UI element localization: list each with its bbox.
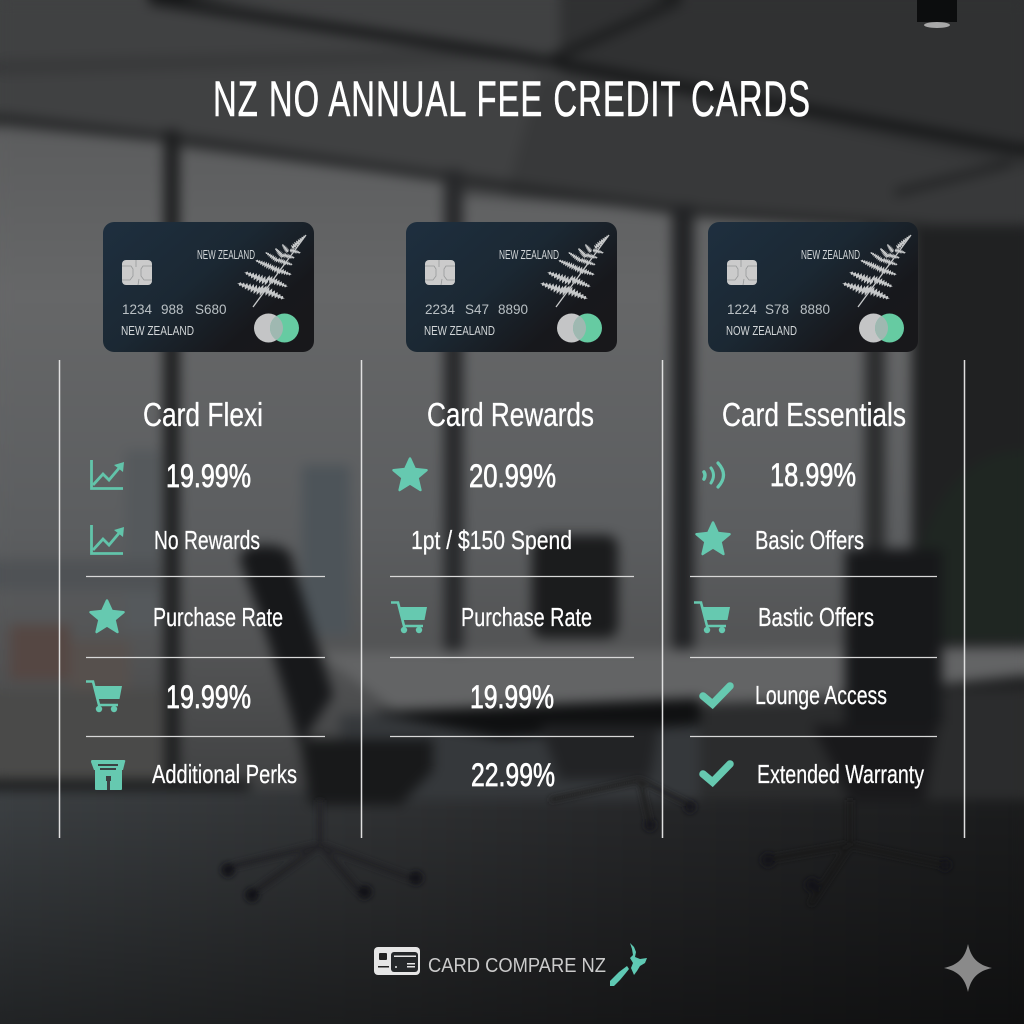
- extended warranty text: Extended Warranty: [757, 759, 924, 789]
- card image: Card Flexi: S680: [195, 302, 227, 317]
- offers text: Bastic Offers: [758, 602, 874, 632]
- row dividers: [690, 576, 937, 736]
- lounge access text: Lounge Access: [755, 680, 887, 710]
- card image: Card Rewards: NEW ZEALAND: [499, 247, 559, 262]
- row dividers: [390, 576, 634, 736]
- row dividers: [86, 576, 325, 736]
- card image: Card Flexi: NEW ZEALAND: [197, 247, 255, 262]
- card image: Card Essentials: 1224: [727, 302, 758, 317]
- icon: contactless waves: [704, 463, 724, 487]
- card image: Card Flexi: [103, 222, 314, 352]
- card image: Card Flexi: 988: [161, 302, 184, 317]
- rate value: 22.99%: [471, 757, 555, 793]
- icon: cart: [391, 602, 427, 633]
- card image: Card Rewards: [406, 222, 617, 352]
- card image: Card Flexi: 1234: [122, 302, 153, 317]
- card image: Card Essentials: NEW ZEALAND: [801, 247, 860, 262]
- rewards text: 1pt / $150 Spend: [411, 525, 572, 555]
- rate value: 19.99%: [166, 458, 251, 494]
- brand name: CARD COMPARE NZ: [428, 955, 606, 977]
- icon: card logo: [374, 947, 420, 975]
- rate value: 18.99%: [770, 457, 856, 493]
- purchase rate text: Purchase Rate: [153, 602, 283, 632]
- icon: star: [696, 522, 730, 554]
- card image: Card Rewards: 8890: [498, 302, 528, 317]
- icon: growth chart: [92, 460, 124, 488]
- heading: Card Rewards: Card Rewards: [427, 396, 594, 433]
- icon: check: [703, 686, 730, 704]
- panel: Card Essentials: [690, 222, 937, 789]
- icon: growth chart: [92, 525, 124, 554]
- card image: Card Rewards: S47: [465, 302, 489, 317]
- card image: Card Essentials: [708, 222, 918, 352]
- icon: star: [90, 600, 124, 632]
- card image: Card Flexi: NEW ZEALAND: [121, 323, 194, 338]
- additional perks text: Additional Perks: [152, 759, 297, 789]
- icon: kiosk: [91, 760, 125, 790]
- icon: check: [703, 764, 730, 782]
- card image: Card Rewards: NEW ZEALAND: [424, 323, 495, 338]
- card image: Card Essentials: 8880: [800, 302, 830, 317]
- icon: sparkle: [944, 944, 992, 992]
- icon: cart: [86, 682, 122, 712]
- card image: Card Essentials: NOW ZEALAND: [726, 323, 797, 338]
- offers text: Basic Offers: [755, 525, 864, 555]
- rewards text: No Rewards: [154, 525, 260, 555]
- card image: Card Essentials: S78: [765, 302, 789, 317]
- icon: cart: [694, 602, 730, 633]
- panel: Card Rewards: [390, 222, 634, 793]
- card image: Card Rewards: 2234: [425, 302, 456, 317]
- rate value: 20.99%: [469, 458, 556, 494]
- panel: Card Flexi: [86, 222, 325, 790]
- footer logo: [374, 943, 647, 986]
- rate value: 19.99%: [470, 679, 554, 715]
- rate value: 19.99%: [166, 679, 251, 715]
- heading: Card Essentials: Card Essentials: [722, 396, 906, 433]
- purchase rate text: Purchase Rate: [461, 602, 592, 632]
- icon: star: [394, 458, 426, 490]
- heading: Card Flexi: Card Flexi: [143, 396, 263, 433]
- column divider lines: [60, 360, 964, 838]
- icon: NZ map: [610, 943, 647, 986]
